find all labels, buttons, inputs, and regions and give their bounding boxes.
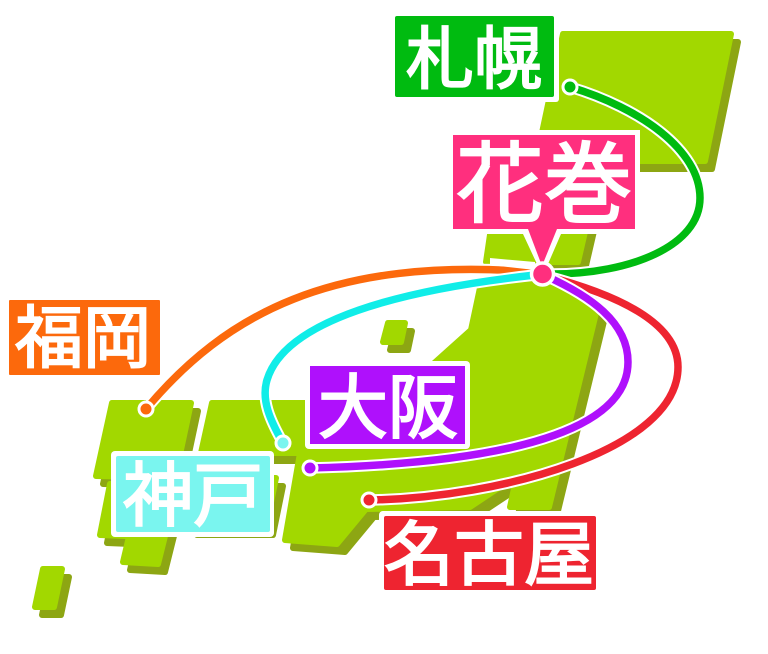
label: Sapporo: 札幌 — [406, 22, 542, 98]
marker: Osaka — [303, 461, 317, 475]
marker: Fukuoka — [139, 402, 153, 416]
marker: Kobe — [276, 436, 290, 450]
label: Nagoya: 名古屋 — [384, 516, 594, 594]
island: Tanegashima — [35, 569, 69, 615]
label: Kobe: 神戸 — [123, 457, 263, 535]
label: Hanamaki with pointer: 花巻 — [456, 135, 632, 234]
route: Fukuoka to Hanamaki — [146, 258, 535, 409]
region: Tohoku north — [486, 180, 604, 270]
marker: Nagoya — [362, 493, 376, 507]
label: Osaka: 大阪 — [318, 369, 458, 447]
route: Nagoya to Hanamaki — [369, 276, 678, 500]
label: Fukuoka: 福岡 — [15, 301, 151, 377]
island: Sado — [383, 323, 412, 350]
route: Kobe to Hanamaki — [265, 275, 535, 443]
route: Osaka to Hanamaki — [310, 276, 628, 468]
region: Shikoku — [190, 478, 283, 535]
region: central Honshu — [201, 283, 606, 552]
label: Hanamaki with pointer — [448, 130, 640, 266]
region: Kyushu north — [96, 403, 198, 486]
marker: Hanamaki hub — [532, 263, 554, 285]
region: Kyushu south — [123, 528, 174, 572]
region: Kyushu middle — [100, 484, 164, 545]
route: Sapporo to Hanamaki — [552, 87, 700, 274]
region: Hokkaido — [536, 34, 738, 169]
marker: Sapporo — [563, 80, 577, 94]
